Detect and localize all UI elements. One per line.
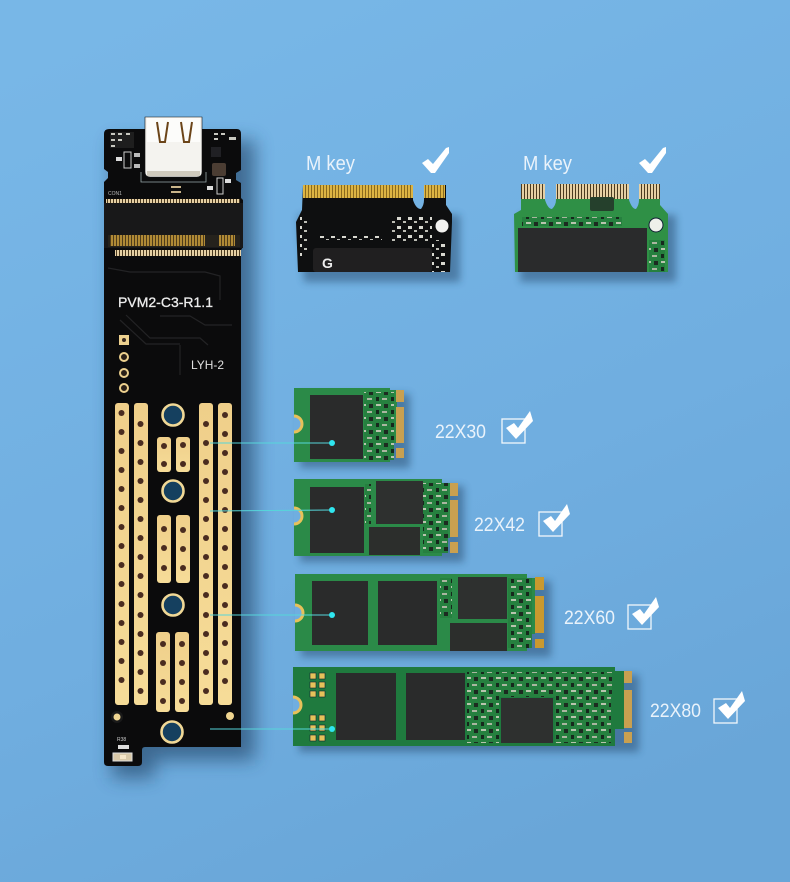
- board shadow: [112, 140, 255, 778]
- card body: [514, 184, 668, 272]
- chip: [518, 228, 647, 272]
- gold fingers: [521, 184, 545, 199]
- card shadow: [300, 486, 464, 562]
- icon: checkbox 22x30: [502, 411, 533, 443]
- chips: [336, 673, 396, 740]
- adapter board: LYH-2: [191, 358, 224, 372]
- card shadow: [520, 215, 676, 282]
- small pads: [111, 711, 234, 723]
- card shadow: [298, 215, 460, 282]
- ssd label 22x42: 22X42: [474, 515, 525, 536]
- card body: [293, 667, 624, 746]
- led: R38: [117, 737, 126, 743]
- m key text right: M key: [523, 153, 572, 175]
- icon: check left: [422, 147, 449, 173]
- card body: [295, 574, 535, 651]
- components: [522, 217, 622, 226]
- card body: [294, 388, 397, 462]
- gold fingers: [303, 185, 413, 198]
- smd areas: [467, 672, 612, 697]
- ssd label 22x60: 22X60: [564, 608, 615, 629]
- gold fingers: [396, 390, 404, 458]
- adapter board: CON1: [108, 191, 122, 197]
- notch: [295, 605, 303, 621]
- usb-c connector: [145, 117, 202, 177]
- notch: [294, 416, 302, 432]
- card body: [296, 185, 452, 272]
- gold pads: [115, 403, 232, 712]
- ssd 22x42: [294, 479, 464, 562]
- board body: [104, 129, 243, 766]
- chip: [310, 395, 363, 459]
- ssd label 22x80: 22X80: [650, 701, 701, 722]
- ssd 22x60: [295, 574, 551, 657]
- gold fingers: [535, 577, 544, 648]
- icon: checkbox 22x42: [539, 504, 570, 536]
- m key text left: M key: [306, 153, 355, 175]
- circuit traces: [108, 268, 232, 375]
- connector lines: [210, 440, 335, 732]
- components: [392, 214, 432, 242]
- adapter board: [104, 117, 255, 778]
- white hole: [649, 218, 663, 232]
- m key card: black: [296, 185, 460, 282]
- m.2 socket: [104, 199, 243, 256]
- gold fingers: [624, 671, 632, 743]
- mounting holes: [162, 404, 184, 742]
- notch: [293, 697, 301, 713]
- m key card: green: [514, 184, 676, 282]
- smd area: [508, 578, 532, 648]
- silkscreen labels: PVM2-C3-R1.1: [118, 294, 213, 310]
- white hole: [436, 220, 448, 232]
- gold fingers: [450, 483, 458, 553]
- ssd 22x30: [294, 388, 410, 468]
- chip: [313, 248, 432, 272]
- smd area: [364, 392, 394, 460]
- printed glyph: G: [322, 255, 333, 271]
- card shadow: [301, 581, 551, 657]
- led: [113, 737, 132, 761]
- icon: checkbox 22x60: [628, 597, 659, 629]
- chips: [312, 581, 368, 645]
- card shadow: [299, 675, 639, 752]
- smd area: [423, 483, 448, 553]
- card shadow: [300, 394, 410, 468]
- top components: [110, 132, 236, 194]
- notch: [294, 508, 302, 524]
- ssd 22x80: [293, 667, 639, 752]
- pad holes: [118, 410, 228, 704]
- card body: [294, 479, 450, 556]
- ssd label 22x30: 22X30: [435, 422, 486, 443]
- gold pad blocks: [310, 673, 325, 741]
- header pads: [119, 335, 129, 392]
- icon: checkbox 22x80: [714, 691, 745, 723]
- chips: [310, 487, 364, 553]
- icon: check right: [639, 147, 666, 173]
